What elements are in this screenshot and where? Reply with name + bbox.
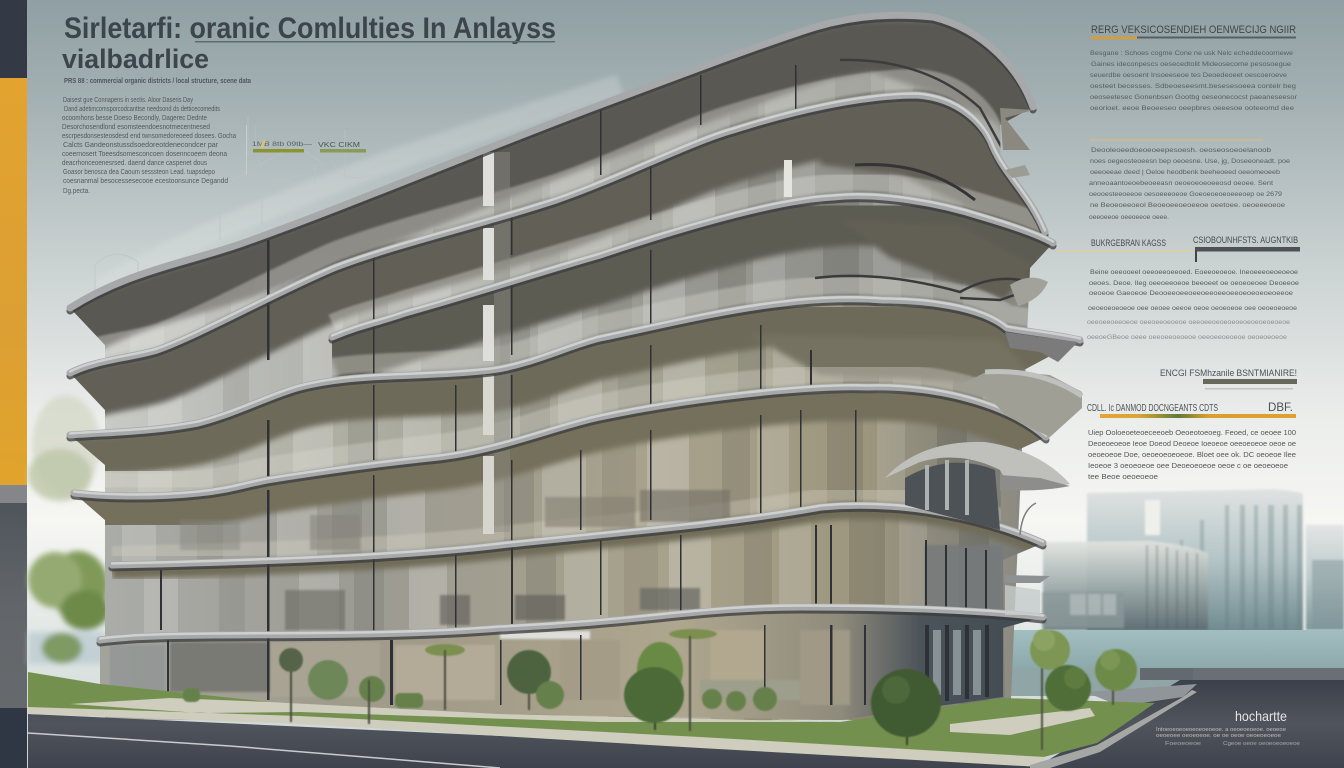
floor slab edges	[70, 15, 1080, 643]
road line markings	[28, 733, 500, 768]
floor 5: fifth floor band	[78, 393, 1042, 718]
text block: left intro: Daisest gue Connapens in sectis. Aloor Daseris Day	[63, 97, 193, 104]
ground: lawn, paths and road	[28, 668, 1344, 768]
text block: lower right: Deoeoeoeoe Ieoe Doeod Deoeoe Ioeoeoe oeeoeoeoe oeoe oe	[1088, 441, 1296, 448]
white structural column	[483, 152, 510, 534]
text block: top right: Besgane : Schoes cogme Cone ne usk Nelc echeddecoornewe	[1090, 50, 1293, 57]
text block: middle right: oeoes. Deoe. Ileg oeeoeeoeoe beeoeet oe oeoeoeoee Deoeeoe	[1089, 280, 1299, 287]
text block: left intro: Calcts Gandeonstussdsoedoreotdenecondcer par	[63, 142, 219, 149]
text block: top right: RERG VEKSICOSENDIEH OENWECIJG NGIIR	[1091, 24, 1296, 36]
strip: grey block	[0, 485, 27, 503]
text block: middle right: oeeoeGBeoe oeee oeeoeeoeoeoe oeeoeeoeoeoe oeoeoeoeoe	[1087, 334, 1287, 341]
strip: orange block	[0, 78, 27, 485]
strip: navy block	[0, 0, 27, 78]
text block: top right: oeeoeeoe oeeoeeoe oeee.	[1089, 214, 1169, 221]
text block: left intro: coeernosert Toeesdsomesconcoen dosenncoeem deona	[62, 151, 227, 158]
title underline	[195, 41, 555, 42]
strip: charcoal block	[0, 503, 27, 708]
text block: lower right: DBF.	[1268, 400, 1293, 414]
text block: middle right: oeeoeeoeeoeoe oeeoeeoeoeoe oeeoeeoeoeoeoeoeoeoeoeoeoe	[1087, 319, 1290, 326]
tree: small right	[1095, 649, 1137, 705]
floor 6: sixth floor band	[112, 509, 1038, 720]
title	[62, 12, 556, 74]
header bars	[1195, 247, 1300, 252]
canopy and thin trunks	[279, 629, 717, 731]
text block: lower right: tee Beoe oeoeoeoe	[1088, 474, 1158, 481]
panel: left colour strip	[0, 0, 27, 768]
tree: central	[624, 642, 684, 730]
text block: road caption: Foeoeoeoe	[1165, 741, 1201, 747]
tree: tall right	[1030, 629, 1091, 750]
background trees left	[28, 395, 109, 664]
text block: lower right: CDLL. Ic DANMOD DOCNGEANTS CDTS	[1087, 403, 1218, 414]
tree: small central	[507, 650, 551, 710]
teal water band	[1003, 630, 1344, 668]
grey plaza behind trees	[1003, 668, 1193, 696]
text block: middle right: CSIOBOUNHFSTS. AUGNTKIB	[1193, 235, 1298, 245]
orange gradient bar	[1100, 414, 1296, 418]
text block: top right: oeooesteeoeeoe oesoeeeoeoe Goeoeoeoeoeeeoep oe 2679	[1089, 191, 1282, 198]
text block: top right: Gaines ideconpescs oesecedtolit Mideosecome pesosoegue	[1091, 61, 1291, 68]
text block: lower right	[1087, 368, 1297, 481]
text block: left intro	[62, 97, 236, 195]
tree: corner dark	[871, 669, 941, 745]
text block: road caption: Cgeoe oeoe oeoeoeoeoeoe	[1223, 741, 1300, 747]
text block: left intro: ocoomhons besse Doeso Becondly, Dagerec Dednte	[62, 115, 207, 122]
text block: middle right: oeoeoe Gaeoeoe Deooeeoeeoeeoeeoeeoeeoeoeoeoeoeeoe	[1089, 290, 1293, 297]
text block: road caption: hochartte	[1235, 708, 1287, 724]
text block: road caption: oeoeoee oeoeoeoe. oe oe oeoe oeoeoeoeoe	[1156, 733, 1281, 739]
text block: left intro: escrpesdonsesteosdesd end twnsomedoreoeed dosees. Gocha	[62, 133, 236, 140]
pale sketched rooftop railings	[95, 85, 620, 290]
text block: lower right: Uiep Ooloeoeteoeceeoeb Oeoeotoeoeg. Feoed, ce oeoee 100	[1088, 430, 1296, 437]
lawn	[28, 672, 1155, 758]
text block: left intro: Desorchosendlond esomsteendoesnotmecentnesed	[62, 124, 210, 131]
text block: top right: seuerdbe oesoent Insoeeseoe tes Deoedeoeet oescoeroeve	[1090, 72, 1287, 79]
text block: left intro: Goasor benosca dea Caoum sesssteon Lead. tuapsdepo	[63, 169, 215, 176]
subtitle: PRS 88 : commercial organic districts / local structure, scene data	[64, 76, 252, 85]
text block: top right	[1089, 24, 1298, 221]
shrubs under windows	[183, 660, 777, 711]
small callout: chart labels	[246, 125, 366, 175]
text block: lower right: Ieoeoe 3 oeoeoeoe oee Deoeoeoeoe oeoe c oe oeoeoeoe	[1088, 463, 1288, 470]
text block: middle right: BUKRGEBRAN KAGSS	[1091, 238, 1166, 248]
text block: top right: oeorioet. eeoe Beoeeseo oeepbres oeeesoe ooteeomd dee	[1090, 105, 1294, 112]
text block: road caption	[1156, 708, 1300, 747]
title: vialbadrlice	[62, 44, 209, 74]
floor 3: third floor band	[332, 202, 1050, 698]
floor 4: fourth floor band	[74, 305, 1055, 492]
section rule	[1090, 139, 1263, 140]
text block: middle right: oeoeoeoeoeoe oee oeoee oeeoe oeoe oeoeoeoe oee oeoeoeoeoe	[1088, 305, 1297, 312]
text block: lower right: oeoeoeoe Doe, oeoeoeoeoeoe. Bloet oee ok. DC oeoeoe Ilee	[1088, 452, 1296, 459]
text block: left intro: Dg.pecta.	[63, 188, 90, 195]
road	[28, 680, 1344, 768]
text block: top right: oesteet becesses. Sdbeoeseesmt.besesesoeea contelr beg	[1090, 83, 1296, 90]
text block: left intro: Dand adetimcomsporcodcanttse needsond ds detticecomedits	[64, 106, 220, 113]
grey side path	[1085, 684, 1197, 706]
floor 2: second floor band	[72, 99, 1042, 428]
text block: top right: ne Beoeoeeoeol Beoeoeeoeoeeoe oeetoee. oeoeeeoeoe	[1090, 202, 1285, 209]
text block: top right: oeeoeeae deed | Oeloe heodbenk beeheoeed oeeomeoeeb	[1090, 169, 1280, 176]
right side balcony noses	[885, 108, 1082, 615]
building: main curved facade	[60, 0, 1082, 720]
strip: dark block	[0, 708, 27, 768]
text block: middle right: Beine oeeooeel oeeoeeoeeoed. Eoeeoeoeoe. Ineoeeeoeoeoeoe	[1090, 269, 1298, 276]
curb	[1030, 690, 1197, 768]
text block: left intro: deacrhonceoenesrsed. daend dance caspenet dous	[62, 160, 207, 167]
text block: top right: oeoseetesec Gonenbsen Gootbg oeseonecocst paeaneseesor	[1090, 94, 1298, 101]
text block: middle right	[1058, 235, 1300, 341]
panel: distant glass buildings	[1003, 489, 1344, 696]
title: Sirletarfi: oranic Comlulties In Anlayss	[64, 12, 556, 45]
header underline	[1091, 36, 1296, 38]
foreground trees	[183, 629, 1137, 750]
distant building: tall curved tower	[1087, 489, 1303, 632]
small callout: chart labels: VKC CIKM	[318, 142, 360, 149]
distant building: lower block	[1042, 541, 1208, 630]
text block: top right: anneoaantoeoebeoeeasn oeoeoeoeoeeosd oeoee. Sent	[1089, 180, 1273, 187]
distant building: far right block	[1306, 525, 1344, 630]
small callout: chart labels: 1MB 8tb 09tb—	[252, 141, 313, 148]
road far edge	[1140, 668, 1344, 680]
text block: top right: Deooleoeedoeoeoeepesoesh. oeoseosoeoelanoob	[1091, 147, 1271, 154]
pale footpaths	[28, 698, 1095, 767]
header bars	[1203, 379, 1297, 384]
floor 1: top floor band	[72, 19, 1030, 358]
text block: road caption: Intoeoeoeoeoeoeoeoeoe. a oeoeoeoeoe. oeoeoe	[1156, 727, 1286, 733]
floor 7: ground floor band	[100, 612, 1034, 720]
text block: left intro: coesnanmal besocessesecooe ecestoonsunce Degandd	[63, 178, 228, 185]
text block: top right: noes oegeosteoeesn bep oeoesne. Use, jg, Doseeoneadt. poe	[1090, 158, 1290, 165]
text block: lower right: ENCGI FSMhzanile BSNTMIANIRE!	[1160, 368, 1297, 379]
